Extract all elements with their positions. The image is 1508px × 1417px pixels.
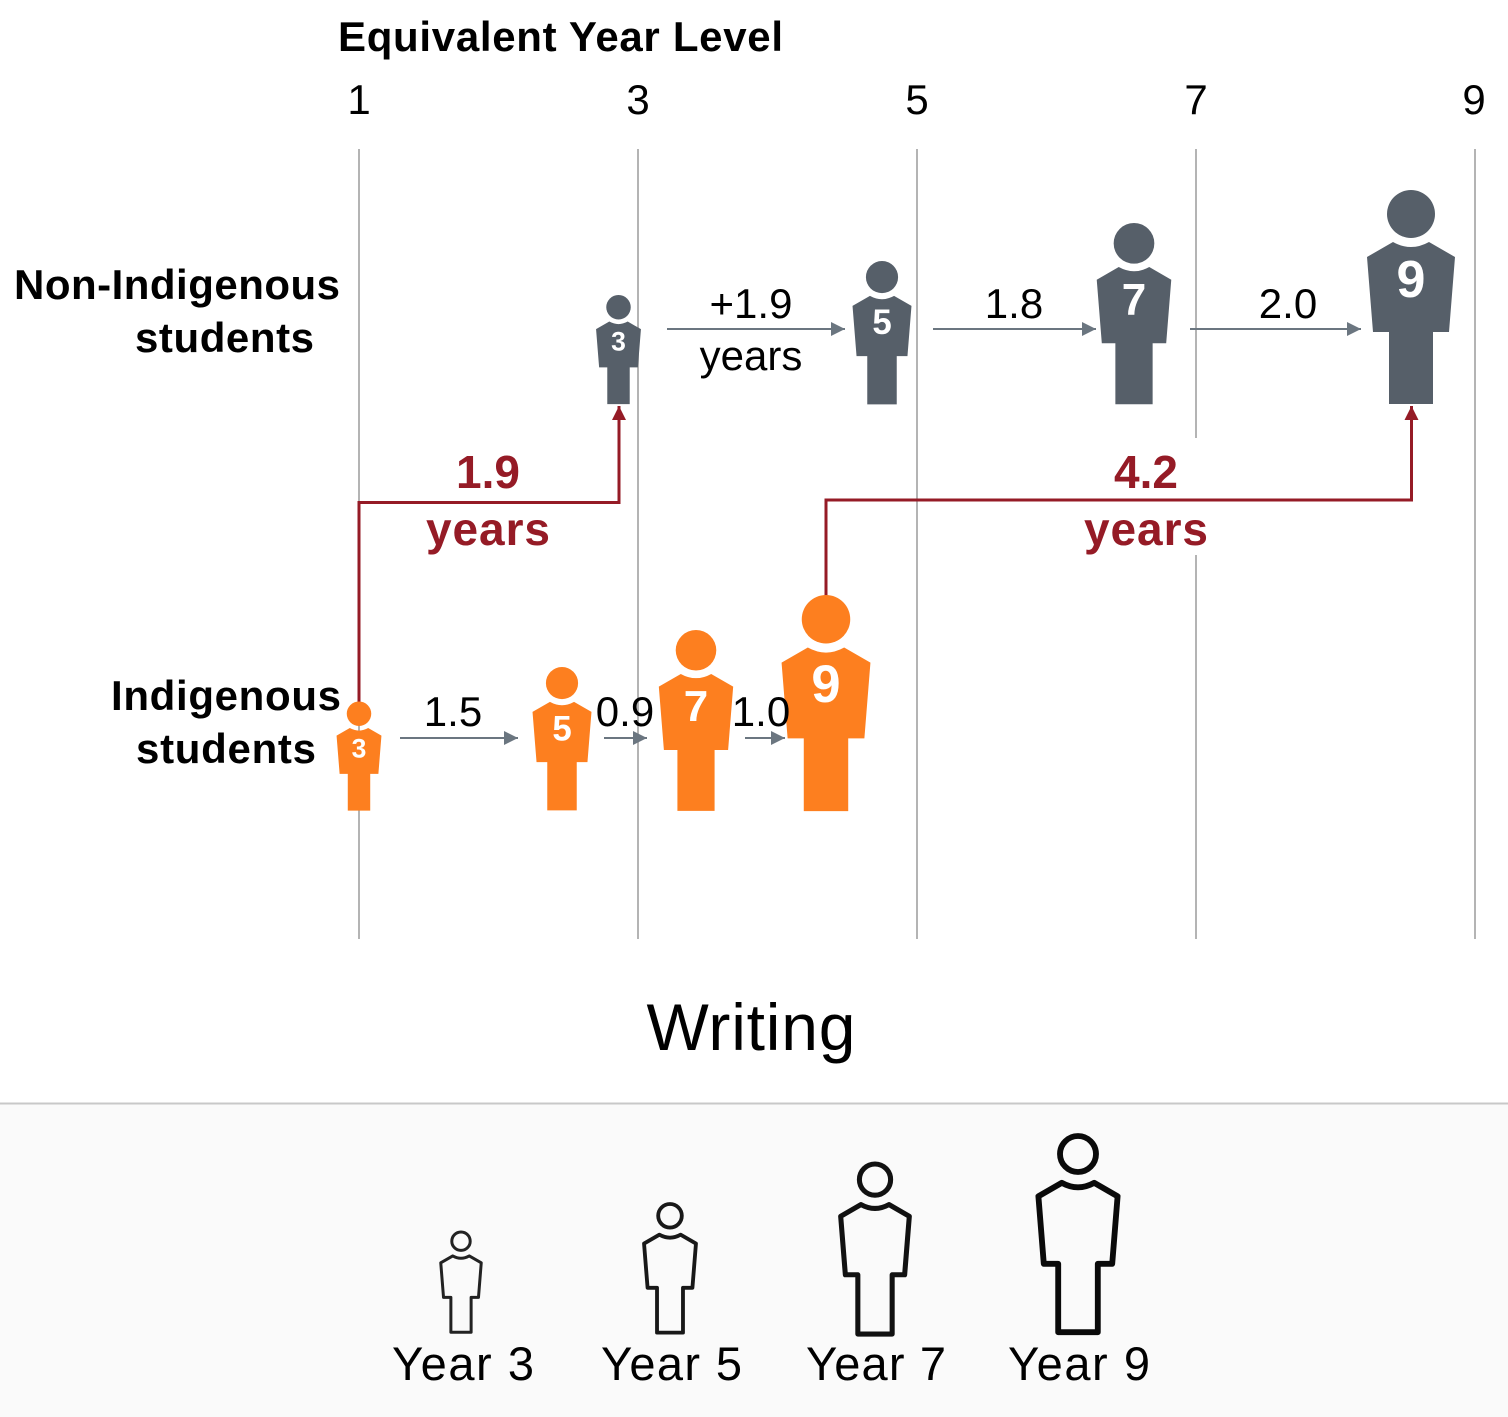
row label: Indigenous students — [111, 672, 341, 772]
gap label: 1.9 years: years — [426, 503, 550, 555]
red gap connector: 1.9 years — [359, 406, 619, 703]
axis labels: 7 — [1184, 76, 1208, 123]
row label: non-Indigenous students — [14, 261, 340, 361]
figure: Indigenous year 5: 5 — [552, 710, 572, 749]
heading: Writing: Writing — [646, 990, 856, 1064]
legend label: Year 7: Year 7 — [806, 1337, 946, 1390]
row label: non-Indigenous students: Non-Indigenous — [14, 261, 340, 308]
legend label: Year 5: Year 5 — [601, 1337, 742, 1390]
arrow and label: non-Indigenous year 3 to 5: +1.9 — [710, 280, 792, 327]
figure: non-Indigenous year 3: 3 — [611, 327, 626, 357]
figure: non-Indigenous year 3 — [596, 295, 641, 404]
gap label: 4.2 years: years — [1084, 503, 1208, 555]
row label: Indigenous students: Indigenous — [111, 672, 341, 719]
arrow and label: Indigenous year 5 to 7: 0.9 — [596, 688, 654, 735]
arrow and label: Indigenous year 7 to 9: 1.0 — [732, 688, 790, 735]
figure: Indigenous year 3: 3 — [352, 734, 366, 764]
figure: Indigenous year 5 — [533, 667, 591, 810]
figure: Indigenous year 7 — [659, 630, 733, 811]
figure: non-Indigenous year 9: 9 — [1397, 251, 1425, 309]
axis labels: 3 — [626, 76, 650, 123]
legend figure: year 3 — [441, 1232, 481, 1332]
gap label: 1.9 years — [426, 446, 550, 555]
figure: Indigenous year 3 — [337, 702, 381, 811]
gap label: 4.2 years: 4.2 — [1114, 446, 1178, 498]
arrow and label: non-Indigenous year 3 to 5 — [667, 280, 845, 379]
legend figure: year 9 — [1038, 1136, 1118, 1332]
legend panel background — [0, 1103, 1508, 1417]
legend figure: year 5 — [644, 1204, 696, 1333]
row label: Indigenous students: students — [136, 725, 316, 772]
axis labels: 9 — [1462, 76, 1486, 123]
legend label: Year 3: Year 3 — [392, 1337, 534, 1390]
figure: Indigenous year 9 — [782, 595, 870, 811]
axis labels — [347, 76, 1486, 123]
figure: non-Indigenous year 5: 5 — [872, 303, 892, 342]
legend label: Year 9: Year 9 — [1008, 1337, 1150, 1390]
figure: non-Indigenous year 9 — [1367, 190, 1455, 404]
arrow and label: non-Indigenous year 3 to 5: years — [700, 332, 802, 379]
figure: non-Indigenous year 7 — [1097, 223, 1171, 404]
axis title: Equivalent Year Level — [338, 13, 783, 60]
gap label: 1.9 years: 1.9 — [456, 446, 520, 498]
axis labels: 5 — [905, 76, 929, 123]
arrow and label: non-Indigenous year 7 to 9: 2.0 — [1259, 280, 1317, 327]
red gap connector: 4.2 years — [826, 406, 1412, 597]
arrow and label: non-Indigenous year 5 to 7: 1.8 — [985, 280, 1043, 327]
row label: non-Indigenous students: students — [135, 314, 314, 361]
figure: Indigenous year 9: 9 — [811, 655, 841, 714]
figure: non-Indigenous year 5 — [853, 261, 911, 404]
figure: Indigenous year 7: 7 — [684, 682, 708, 731]
axis labels: 1 — [347, 76, 371, 123]
legend figure: year 7 — [841, 1164, 909, 1334]
gap label: 4.2 years — [1084, 446, 1208, 555]
figure: non-Indigenous year 7: 7 — [1122, 275, 1146, 324]
arrow and label: Indigenous year 3 to 5: 1.5 — [424, 688, 482, 735]
arrow and label: Indigenous year 3 to 5 — [400, 688, 518, 738]
